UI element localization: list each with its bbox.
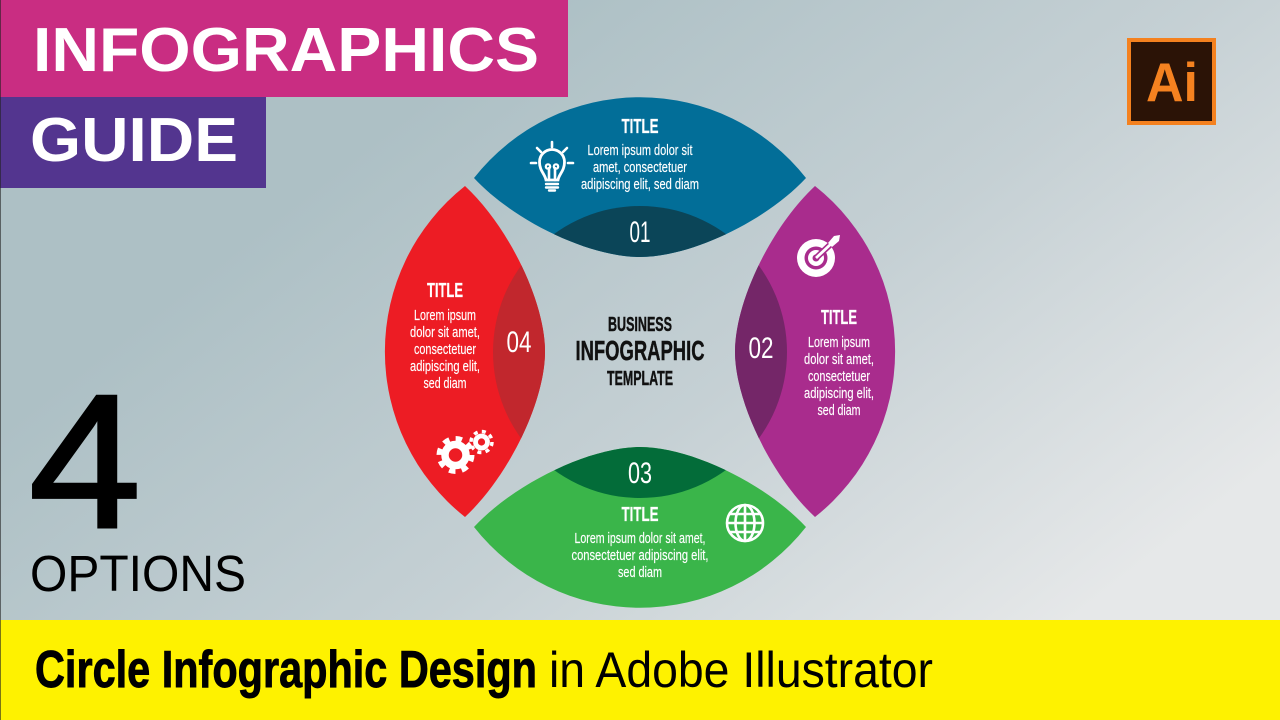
label: OPTIONS: OPTIONS: [30, 545, 246, 602]
banner: GUIDE: [0, 97, 266, 188]
body 02: adipiscing elit,: [804, 386, 874, 402]
icon: globe: [727, 505, 763, 541]
icon: gears: [439, 432, 492, 472]
banner: GUIDE: GUIDE: [30, 106, 238, 175]
number 01: 01: [630, 216, 650, 249]
body 02: sed diam: [818, 403, 860, 419]
segment 04: left red: [384, 186, 545, 517]
number tab 03: [554, 447, 726, 498]
banner: INFOGRAPHICS: INFOGRAPHICS: [33, 16, 539, 85]
icon: light bulb: [531, 142, 573, 190]
body 04: Lorem ipsum: [414, 308, 476, 324]
big number 4: 4: [29, 356, 141, 568]
icon: Adobe Illustrator logo: Ai: [1146, 51, 1198, 113]
footer strip: [0, 620, 1280, 720]
number 03: 03: [628, 457, 652, 490]
segment 02: right purple: [735, 186, 896, 517]
title 04: TITLE: [427, 280, 463, 302]
title 01: TITLE: [622, 116, 658, 138]
segment 03: bottom green: [474, 447, 806, 608]
number 02: 02: [748, 332, 774, 365]
center heading: [576, 314, 704, 390]
body 03: Lorem ipsum dolor sit amet,: [574, 531, 706, 547]
segment 01: top blue: [474, 97, 806, 257]
title 03: TITLE: [622, 504, 658, 526]
number tab 04: [493, 265, 545, 438]
icon: Adobe Illustrator logo: [1129, 40, 1214, 123]
center heading: INFOGRAPHIC: [576, 335, 704, 366]
body 03: consectetuer adipiscing elit,: [572, 548, 708, 564]
body 04: sed diam: [424, 376, 466, 392]
center heading: TEMPLATE: [607, 368, 673, 390]
icon: target with arrow: [797, 235, 840, 277]
title 02: TITLE: [821, 307, 857, 329]
body 02: dolor sit amet,: [804, 352, 874, 368]
body 01: Lorem ipsum dolor sit: [588, 143, 692, 159]
number tab 02: [735, 265, 787, 438]
footer title: in Adobe Illustrator: [549, 642, 933, 698]
footer title: Circle Infographic Design: [35, 641, 537, 699]
banner: INFOGRAPHICS: [0, 0, 568, 97]
body 04: consectetuer: [414, 342, 476, 358]
body 01: adipiscing elit, sed diam: [581, 177, 699, 193]
number tab 01: [554, 206, 726, 257]
body 02: [804, 335, 874, 419]
number 04: 04: [506, 326, 532, 359]
body 02: Lorem ipsum: [808, 335, 870, 351]
body 02: consectetuer: [808, 369, 870, 385]
body 04: dolor sit amet,: [410, 325, 480, 341]
body 03: [572, 531, 708, 581]
body 01: amet, consectetuer: [593, 160, 687, 176]
body 03: sed diam: [618, 565, 662, 581]
body 01: [581, 143, 699, 193]
body 04: adipiscing elit,: [410, 359, 480, 375]
center heading: BUSINESS: [608, 314, 672, 336]
body 04: [410, 308, 480, 392]
